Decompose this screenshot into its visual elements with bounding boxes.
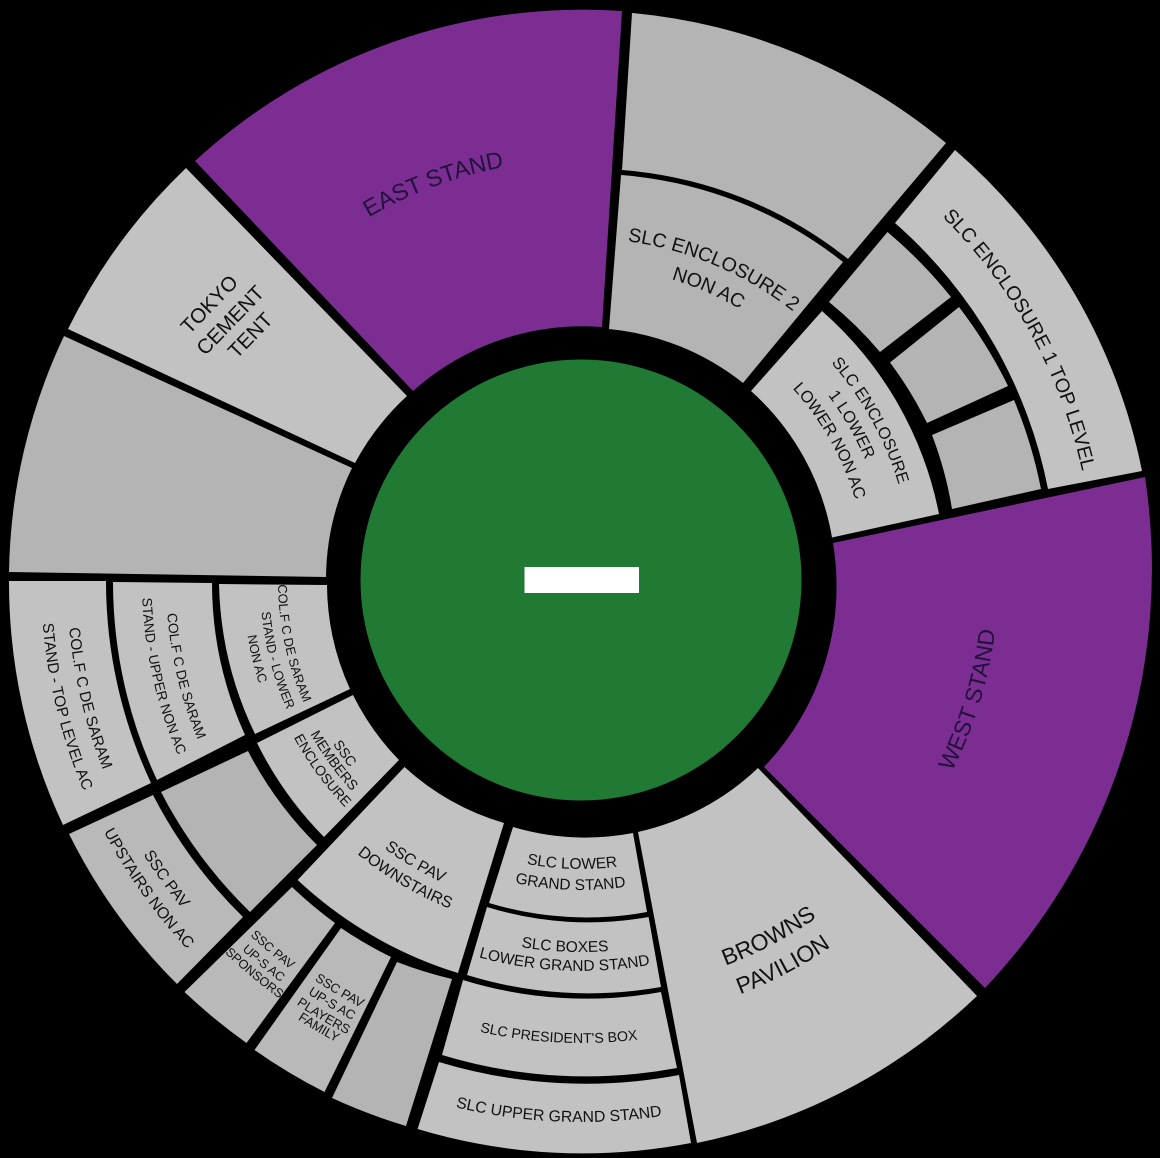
label: SLC Lower Grand Stand: SLC LOWER: [528, 854, 617, 869]
section: Col. F C De Saram Stand Upper Non AC: [113, 582, 245, 780]
label: East Stand: EAST STAND: [362, 152, 502, 216]
section: Col. F C De Saram Stand Lower Non AC: [219, 584, 350, 734]
label: Col. F C De Saram Stand Lower Non AC: COL.F C DE SARAM: [278, 585, 312, 702]
label: SLC Enclosure 1 Lower Lower Non AC: SLC ENCLOSURE: [833, 358, 910, 484]
section: small enclosure cell 1: [829, 232, 951, 352]
section: small enclosure cell 2: [890, 307, 1008, 423]
label: SLC Enclosure 2 Non AC: NON AC: [673, 266, 744, 307]
label: SLC Enclosure 1 Lower Lower Non AC: [794, 358, 910, 498]
label: SLC Enclosure 1 Top Level: SLC ENCLOSURE 1 TOP LEVEL: [944, 210, 1094, 470]
label: Col. F C De Saram Stand Top Level AC: COL.F C DE SARAM: [70, 628, 112, 769]
label: SSC Pav Up-S AC Sponsors: [226, 930, 296, 998]
section: SSC Members Enclosure: [257, 695, 399, 837]
section: SLC Boxes Lower Grand Stand: [467, 907, 661, 994]
label: SSC Pav Up-S AC Players Family: PLAYERS: [297, 997, 350, 1034]
section: SLC Enclosure 2 Non AC: [609, 175, 843, 383]
label: SSC Members Enclosure: ENCLOSURE: [294, 734, 352, 807]
label: SSC Pav Up-S AC Sponsors: UP-S AC: [244, 944, 284, 981]
section: small enclosure cell 3: [932, 400, 1041, 509]
section: SLC Enclosure 1 Top Level: [895, 150, 1142, 489]
section: unnamed large block: [9, 336, 352, 577]
section: SLC President's Box: [442, 980, 677, 1076]
label: SSC Members Enclosure: MEMBERS: [310, 730, 358, 790]
label: SSC Members Enclosure: SSC: [334, 740, 356, 766]
label: Col. F C De Saram Stand Top Level AC: [43, 624, 112, 790]
section: Browns Pavilion: [638, 768, 977, 1143]
label: SSC Pav Up-S AC Sponsors: SPONSORS: [226, 948, 284, 998]
label: Browns Pavilion: [722, 906, 830, 994]
label: SLC Lower Grand Stand: [516, 854, 625, 890]
label: SSC Pav Up-S AC Players Family: [297, 974, 366, 1040]
label: Tokyo Cement Tent: TOKYO: [176, 271, 243, 338]
label: Col. F C De Saram Stand Upper Non AC: STAND - UPPER NON AC: [142, 598, 186, 754]
label: Col. F C De Saram Stand Lower Non AC: NON AC: [248, 635, 266, 682]
label: SSC Pav Up-S AC Sponsors: SSC PAV: [252, 930, 296, 968]
label: Col. F C De Saram Stand Lower Non AC: STAND - LOWER: [262, 612, 294, 710]
section: SLC Upper Grand Stand: [418, 1062, 691, 1154]
label: SSC Pav Up-S AC Players Family: SSC PAV: [316, 974, 366, 1006]
pitch: green field: [360, 360, 802, 800]
pitch marker: white rectangle: [524, 567, 639, 593]
section: Tokyo Cement Tent: [68, 168, 407, 463]
section: SSC Pav Downstairs: [298, 767, 504, 973]
label: Browns Pavilion: PAVILION: [736, 934, 830, 994]
section: unnamed cell beside Players Family: [332, 962, 452, 1126]
label: SLC Boxes Lower Grand Stand: LOWER GRAND STAND: [480, 947, 649, 971]
section: Col. F C De Saram Stand Top Level AC: [9, 581, 151, 825]
label: SSC Pav Downstairs: SSC PAV: [386, 841, 448, 881]
label: Col. F C De Saram Stand Lower Non AC: [248, 585, 312, 710]
label: SLC Upper Grand Stand: SLC UPPER GRAND STAND: [456, 1098, 661, 1122]
label: SLC Boxes Lower Grand Stand: [480, 937, 649, 971]
label: SSC Pav Upstairs Non AC: SSC PAV: [144, 850, 191, 906]
label: SSC Pav Up-S AC Players Family: FAMILY: [298, 1012, 340, 1040]
section: SLC Lower Grand Stand: [489, 827, 647, 918]
label: SLC Enclosure 2 Non AC: SLC ENCLOSURE 2: [628, 228, 800, 311]
label: SSC Pav Upstairs Non AC: UPSTAIRS NON AC: [106, 828, 194, 948]
label: Tokyo Cement Tent: CEMENT: [192, 281, 269, 360]
label: SLC Enclosure 1 Lower Lower Non AC: 1 LOWER: [828, 390, 874, 460]
label: SSC Pav Up-S AC Players Family: UP-S AC: [310, 986, 356, 1019]
label: SSC Pav Downstairs: DOWNSTAIRS: [358, 846, 452, 908]
label: SLC Lower Grand Stand: GRAND STAND: [516, 873, 625, 890]
label: Col. F C De Saram Stand Top Level AC: STAND - TOP LEVEL AC: [43, 624, 92, 790]
section: SLC Enclosure 1 Lower Lower Non AC: [751, 311, 939, 538]
section: East Stand: [195, 10, 622, 391]
label: SLC President's Box: SLC PRESIDENT'S BOX: [480, 1022, 638, 1043]
label: SLC Enclosure 1 Lower Lower Non AC: LOWER NON AC: [794, 382, 866, 498]
label: SLC Boxes Lower Grand Stand: SLC BOXES: [522, 937, 608, 952]
label: Tokyo Cement Tent: [176, 271, 278, 363]
section: unnamed cell beside SSC Members Enclosure: [161, 751, 317, 912]
section: SSC Pav Up-S AC Sponsors: [184, 887, 335, 1043]
section: West Stand: [764, 477, 1152, 988]
section: SSC Pav Up-S AC Players Family: [254, 928, 391, 1092]
section: unnamed upper block above SLC Enclosure 2: [622, 13, 946, 259]
label: Browns Pavilion: BROWNS: [722, 906, 814, 965]
label: Col. F C De Saram Stand Upper Non AC: COL.F C DE SARAM: [168, 614, 206, 739]
label: Col. F C De Saram Stand Upper Non AC: [142, 598, 206, 754]
section: SSC Pav Upstairs Non AC: [69, 795, 243, 984]
label: West Stand: WEST STAND: [938, 630, 994, 768]
label: Tokyo Cement Tent: TENT: [224, 308, 278, 363]
